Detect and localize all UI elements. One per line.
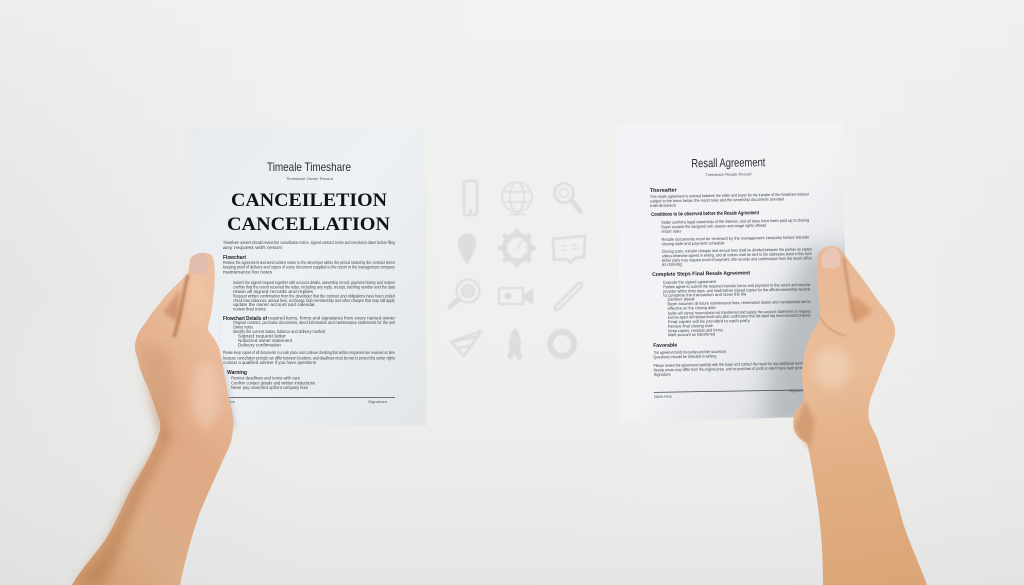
left document title: Timeale Timeshare xyxy=(267,160,351,174)
icon: chat bubble xyxy=(553,236,585,263)
right document body text: This agreement binds the parties and their successors xyxy=(653,349,726,355)
right document body text: Escrow agent will release funds only after confirmation that the deed has been recorded properly xyxy=(668,312,811,320)
left hand shading xyxy=(75,274,220,585)
right document body text: effective on the closing date xyxy=(668,305,716,311)
left document body text: any request with resort xyxy=(223,245,283,250)
right document body text: Conditions to be observed before the Resale Agreement xyxy=(651,210,759,218)
right document body text: to complete the transaction and close the file xyxy=(663,291,747,298)
left document body text: Submit the signed request together with account details, ownership record, payment history and notices xyxy=(233,280,395,285)
right document body text: Keep copies, receipts and forms xyxy=(668,327,723,333)
left document body text: Flowchart xyxy=(223,255,246,261)
icon: map pin xyxy=(458,233,476,265)
icon: magnifier xyxy=(450,280,480,307)
right document body text: This resale agreement is entered between the seller and buyer for the transfer of the timeshare interest xyxy=(650,191,810,199)
right thumbnail xyxy=(822,247,840,269)
left document body text: because cancellation periods can differ between locations, and deadlines must be met to protect the owner rights xyxy=(223,356,395,360)
right document text xyxy=(649,154,815,399)
right document body text: Resale documents must be reviewed by the management company before transfer xyxy=(661,234,810,242)
icon: video camera xyxy=(499,288,533,305)
right document body text: provider within thirty days, and shall deliver signed copies for the official ownership records xyxy=(663,286,810,294)
left document body text: Please keep copies of all documents in a safe place and continue checking that written responses are received on time xyxy=(223,350,396,355)
left signature line: Name xyxy=(228,399,236,404)
left document body text: Warning xyxy=(227,370,247,376)
cancellation heading: CANCELLATION xyxy=(227,214,390,235)
left document body text xyxy=(223,240,396,390)
right document body text: Complete Steps Final Resale Agreement xyxy=(652,270,750,278)
left document body text: Review the agreement and send written notice to the developer within the period stated by the contract terms xyxy=(223,260,395,265)
right document body text: Final copies will be provided to each party xyxy=(668,318,751,324)
right document body text: Buyer accepts the assigned unit, season and usage rights offered xyxy=(661,223,767,229)
icon: ribbon xyxy=(507,328,523,360)
left document body text: contact a qualified adviser if you have questions xyxy=(223,360,316,365)
right document body text: Review final closing note xyxy=(668,323,714,329)
left signature line: Signature xyxy=(368,399,388,404)
left document body text: Review deadlines and terms with care xyxy=(231,376,301,380)
left document body text: Notarized owner statement xyxy=(238,338,293,343)
left signature line xyxy=(227,397,395,404)
left document body text: required items, forms and signatures from every named owner xyxy=(268,316,396,320)
cancellation heading: CANCEILETION xyxy=(231,190,387,211)
left hand silhouette xyxy=(72,253,234,585)
right document body text: at closing xyxy=(662,261,683,267)
left document body text: check loan balances, annual fees, exchange club membership and other charges that may still apply xyxy=(233,298,396,303)
icon: search face xyxy=(554,184,580,211)
icon: ring xyxy=(550,332,574,356)
right document subtitle: Timeshare Resale Record xyxy=(705,171,752,177)
left document body text: Request written confirmation from the developer that the contract and obligations have been ended xyxy=(233,294,396,298)
hand shadow on right paper xyxy=(762,250,860,430)
left document body text: keeping proof of delivery and copies of every document supplied to the resort or the management company xyxy=(223,264,396,270)
left document body text: Delivery confirmation xyxy=(238,342,282,348)
left document body text: Identify the current status, balance and delivery method xyxy=(233,329,326,334)
resale agreement title: Resall Agreement xyxy=(691,155,766,170)
left document body text: update the owner account and calendar xyxy=(233,302,316,307)
hand shadow on left paper xyxy=(216,262,237,428)
left arm and hand xyxy=(72,253,237,585)
icon: paper clip xyxy=(557,285,580,308)
right document body text: Execute the signed agreement xyxy=(663,279,717,285)
right signature line: Signature xyxy=(789,388,805,393)
left document body text: Timeshare owners should review the cancellation notice, signed contract terms and rescission dates before filing xyxy=(223,240,396,245)
cancellation heading xyxy=(227,190,390,235)
right document body text: subject to the terms below, the resort rules and the ownership documents provided xyxy=(650,196,785,203)
right arm and hand xyxy=(793,246,927,585)
right document body text: Please review the agreement carefully with the buyer and contact the resort for any additional terms xyxy=(653,361,804,368)
right document body text: maintenance xyxy=(650,203,677,208)
left document subtitle: Timeshare Owner Record xyxy=(286,176,333,181)
right signature line: Name Here xyxy=(654,394,673,399)
left document body text: Owner notes xyxy=(233,324,253,330)
left document xyxy=(191,126,426,426)
right document body text: Deliver deed xyxy=(667,296,695,302)
right document body text xyxy=(650,185,814,377)
left document body text: retain all signed records and replies xyxy=(233,289,313,294)
left document body text: Flowchart Details of xyxy=(223,316,267,322)
left document body text: review final notice xyxy=(233,306,267,312)
left paper sheet xyxy=(191,126,426,426)
right document body text: resort rules xyxy=(661,229,681,234)
icon: globe xyxy=(502,182,532,214)
left document body text: maintenance fee notes xyxy=(223,270,272,274)
right document body text: Parties agree to submit the required transfer forms and payment to the resort and escrow xyxy=(663,282,811,289)
left document body text: Signed request letter xyxy=(238,334,287,338)
right document body text: Either party may request proof of payment, title records and confirmation from the resort office xyxy=(662,255,812,263)
right document body text: Closing costs, transfer charges and annual fees shall be divided between the parties as stated xyxy=(662,246,812,254)
left thumbnail xyxy=(191,253,208,274)
left document body text: Original contract, purchase documents, deed information and maintenance statements for the unit xyxy=(233,320,396,325)
right document body text: Favorable xyxy=(653,343,677,349)
icon grid xyxy=(450,181,585,360)
right document body text: Thereafter xyxy=(650,188,677,194)
right signature line xyxy=(654,388,805,399)
right document body text: closing date and payment schedule xyxy=(662,240,725,246)
right document body text: Resale prices may differ from the original price, and no promises of profit or return have been given xyxy=(654,365,804,372)
right document body text: Seller confirms legal ownership of the interest, and all dues have been paid up to closing xyxy=(661,217,810,225)
right document body text: Mark account as transferred xyxy=(668,331,716,337)
right hand silhouette xyxy=(793,246,927,585)
icon: phone xyxy=(464,181,477,215)
right document body text: Questions should be directed in writing xyxy=(653,353,717,359)
right document body text: Seller will cancel reservations not transferred and supply the account statement on request xyxy=(668,308,811,316)
right document body text: Buyer assumes all future maintenance fees, reservation duties and membership terms xyxy=(667,299,811,306)
left document body text: confirm that the resort received the letter, including any reply, receipt, tracking number and the date xyxy=(233,284,396,290)
right paper sheet xyxy=(616,122,846,423)
right hand shading xyxy=(794,258,872,450)
right document body text: unless otherwise agreed in writing, and all notices shall be sent to the addresses listed in this form xyxy=(662,251,812,258)
icon: gear xyxy=(500,231,534,265)
icon: compass tool xyxy=(451,331,481,356)
left document body text: Never pay unverified upfront company fees xyxy=(231,385,308,390)
right document body text: Signature xyxy=(654,372,671,377)
right document xyxy=(620,158,845,420)
left document body text: Confirm contact details and written instructions xyxy=(231,380,315,386)
